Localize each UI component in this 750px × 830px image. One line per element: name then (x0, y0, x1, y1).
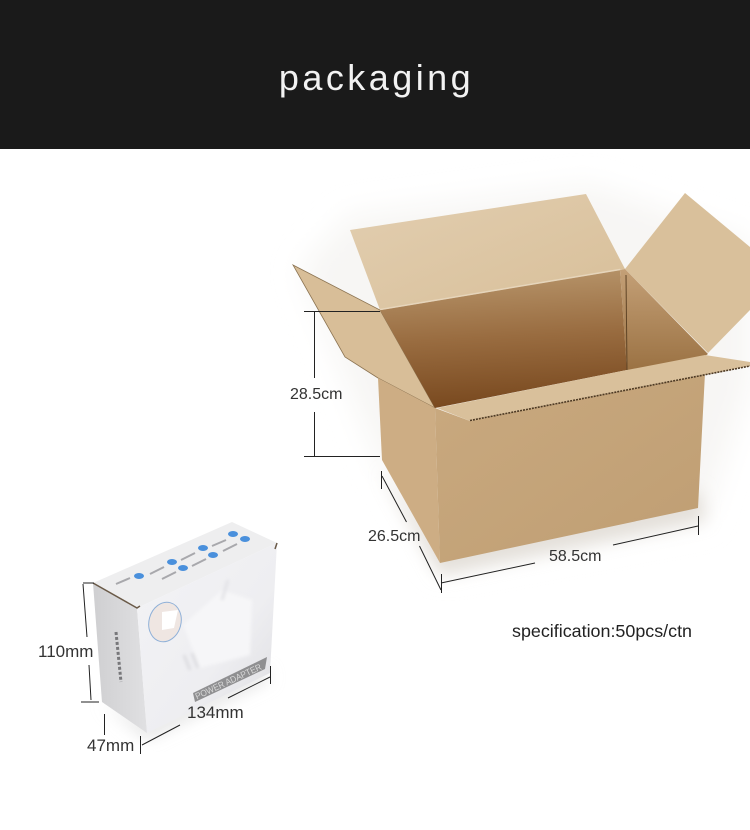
title banner: packaging (279, 57, 474, 98)
inner back wall (380, 270, 627, 408)
box left side (93, 583, 147, 733)
dimension: box depth 47mm: 47mm (87, 736, 134, 755)
title banner (0, 0, 750, 149)
box top (93, 522, 277, 608)
power adapter ribbon: POWER ADAPTER (194, 662, 264, 701)
dimension: carton depth 26.5cm (368, 471, 441, 590)
dimension: box depth 47mm (87, 714, 140, 755)
adapter illustration (183, 580, 252, 670)
back flap (350, 194, 625, 310)
inner corner crease (626, 275, 627, 370)
small product box (93, 522, 277, 738)
dimension: carton depth 26.5cm: 26.5cm (368, 528, 420, 545)
dimension: box height 110mm: 110mm (38, 642, 93, 661)
dimension: box height 110mm (38, 583, 99, 702)
dimension: box width 134mm: 134mm (187, 703, 244, 722)
back rim highlight (380, 270, 620, 310)
carton floor shadow (382, 470, 705, 575)
left outer face (378, 378, 440, 563)
right flap (625, 193, 750, 353)
box front (137, 543, 277, 733)
dimension: carton height 28.5cm: 28.5cm (290, 386, 342, 403)
carton background glow (300, 185, 750, 570)
inner right wall (620, 269, 708, 372)
product photo circle (144, 599, 186, 645)
corrugated edge (470, 366, 750, 420)
dimension: carton length 58.5cm: 58.5cm (549, 548, 601, 565)
front flap (437, 355, 750, 421)
left flap (293, 265, 435, 408)
side print (116, 632, 121, 682)
dimension: box width 134mm (142, 666, 270, 745)
box corner edges (93, 543, 277, 608)
large open carton (293, 185, 750, 575)
dimension: carton height 28.5cm (290, 312, 380, 456)
specification text: specification:50pcs/ctn (512, 621, 692, 641)
icon row: blue feature dots (134, 531, 250, 579)
front face (435, 373, 705, 563)
dimension: carton length 58.5cm (441, 516, 698, 593)
icon captions (116, 540, 237, 584)
box shadow (102, 670, 270, 738)
